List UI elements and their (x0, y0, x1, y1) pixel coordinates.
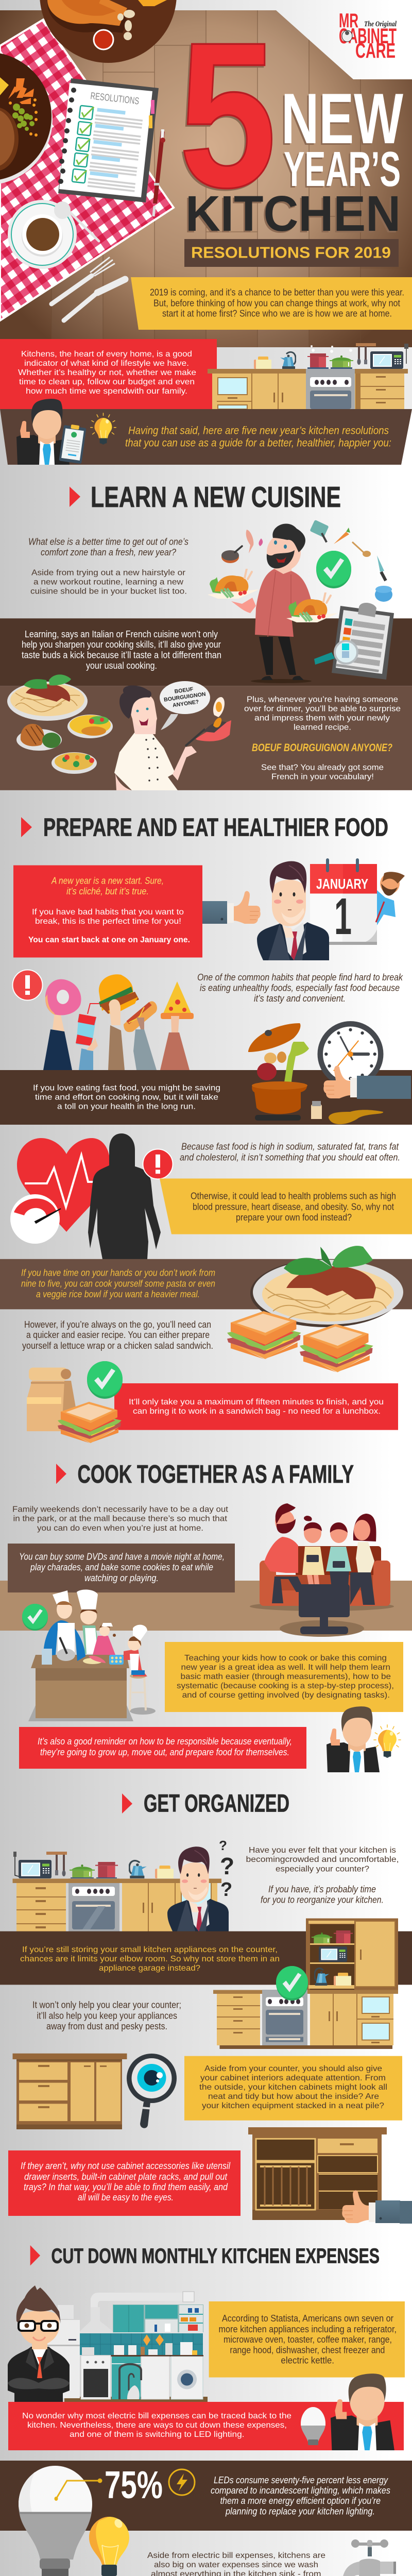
icon: warning (143, 1149, 173, 1179)
text block: clear counter: away from dust and pesky pests. (46, 2021, 167, 2031)
text block: comfort zone: cuisine should be in your bucket list too. (30, 587, 187, 596)
lighter band: surprise guests: French in your vocabulary! (271, 772, 374, 781)
father baker (43, 1590, 85, 1661)
icon: big spaghetti plate (250, 1246, 403, 1327)
father (264, 1503, 305, 1603)
dark band: sharpen skills: help you sharpen your cooking skills, it’ll also give your (22, 639, 221, 650)
red panel: responsibility: they’re going to grow up, move out, and prepare food for themselves. (40, 1747, 289, 1757)
text block: on the go: a quicker and easier recipe. You can either prepare (26, 1329, 210, 1340)
yellow panel: cabinet interiors: Aside from your counter, you should also give (204, 2064, 382, 2073)
brown band: pasta: If you have time on your hands or you don’t work from (21, 1267, 215, 1278)
red panel: cabinet accessories: If they aren’t, why not use cabinet accessories like utensil (21, 2160, 231, 2171)
icon: bearded man peeking (376, 872, 405, 925)
red intro panel: Whether it’s healthy or not, whether we make (18, 368, 196, 377)
yellow panel: cabinet interiors (184, 2056, 402, 2121)
top-right white corner (276, 10, 412, 79)
lighter band: surprise guests: learned recipe. (294, 723, 351, 732)
question marks: ? (220, 1879, 232, 1901)
dark band: appliance garage (0, 1931, 412, 1985)
dark band: sharpen skills: your usual cooking. (86, 660, 157, 671)
food plate: spaghetti (7, 674, 88, 721)
subtitle banner (184, 239, 399, 267)
red panel: new start: it’s cliché, but it’s true. (66, 886, 149, 896)
text block: comfort zone: Aside from trying out a new hairstyle or (31, 568, 186, 577)
yellow panel: statista (209, 2301, 405, 2377)
title: big five: 5 (179, 0, 277, 231)
icon: green check badge (316, 551, 351, 588)
plate of roast chicken (40, 0, 177, 63)
icon: light bulb (91, 413, 116, 445)
text block: on the go: yourself a lettuce wrap or a chicken salad sandwich. (22, 1340, 213, 1351)
floor band (0, 1581, 412, 1631)
text block: crowded kitchen: especially your counter? (276, 1865, 369, 1873)
dark band: sharpen skills: Learning, says an Italian or French cuisine won’t only (25, 629, 218, 639)
icon: yellow incandescent bulb (89, 2517, 129, 2576)
resolutions notebook (58, 78, 159, 202)
dark band: 75% (0, 2461, 412, 2531)
coffee cup on saucer (8, 200, 99, 269)
wood table hero background (0, 10, 412, 347)
text block: crowded kitchen: becomingcrowded and uncomfortable, (246, 1855, 399, 1864)
text block: on the go (22, 1319, 213, 1351)
text block: crowded kitchen: If you have, it’s probably time (268, 1884, 376, 1894)
text block: comfort zone: What else is a better time to get out of one’s (28, 536, 188, 547)
dark band: sharpen skills: taste buds a kick because it’ll taste a lot different than (22, 650, 221, 660)
speech bubble: ANYONE? (172, 699, 199, 708)
red intro panel: indicator of what kind of lifestyle we have. (24, 359, 189, 368)
food plate: fries and chicken (67, 715, 113, 738)
stat: 75 percent: 75% (105, 2463, 163, 2506)
brown band: pasta (0, 1259, 412, 1309)
red panel: responsibility: It’s also a good reminder on how to be responsible because eventually, (38, 1736, 292, 1747)
notebook heading: RESOLUTIONS (90, 91, 140, 107)
icon: sandwiches (227, 1311, 373, 1372)
fork and knife (52, 258, 125, 320)
icon: chef holding turkeys (208, 523, 338, 683)
brand logo: MR (339, 10, 358, 32)
icon: thumbs up (342, 2191, 412, 2224)
speech bubble: BOURGUIGNON (163, 691, 206, 703)
food plate: grilled chicken and salad (16, 724, 62, 751)
open cabinet with plate rack (248, 2127, 387, 2220)
pen (153, 129, 165, 216)
calendar: January 1 (310, 860, 377, 945)
lighter band: surprise guests: and impress them with your newly (254, 714, 390, 722)
icon: businessman with clipboard (16, 399, 87, 465)
dark band: health toll: time and effort on cooking now, but it will take (35, 1093, 218, 1101)
red panel: fifteen minutes (114, 1383, 398, 1430)
text block: crowded kitchen: Have you ever felt that your kitchen is (249, 1846, 396, 1855)
text block: common habits: it’s tasty and convenient. (254, 993, 346, 1004)
icon: chef with frying pan and speech bubble (114, 681, 231, 790)
text block: clear counter: it’ll also help you keep your appliances (37, 2010, 177, 2021)
question marks (219, 1838, 234, 1901)
closed cabinet (12, 2054, 127, 2129)
question marks: ? (219, 1838, 227, 1853)
icon: green check badge (22, 1604, 48, 1631)
text block: on the go: However, if you’re always on the go, you’ll need can (24, 1319, 211, 1330)
food plate: mixed vegetables (52, 752, 97, 774)
icon: man with glasses (8, 2285, 70, 2402)
text block: water expenses: Aside from electric bill expenses, kitchens are (147, 2551, 325, 2560)
yellow panel: prepare own food: prepare your own food instead? (236, 1212, 352, 1223)
icon: warning (12, 970, 42, 1001)
brand logo: The Original (364, 20, 397, 28)
son (326, 1522, 351, 1592)
icon: cooking pot with falling vegetables (248, 1023, 383, 1124)
dark band: 75%: planning to replace your kitchen lighting. (225, 2506, 375, 2517)
icon: magnifier with eye (127, 2054, 177, 2128)
text block: common habits (197, 972, 404, 1004)
icon: green check badge (87, 1361, 123, 1399)
section 1 heading: LEARN A NEW CUISINE (91, 481, 341, 513)
plate of steak and vegetables (0, 52, 53, 185)
dark band: appliance garage: If you’re still storing your small kitchen appliances on the counter, (22, 1945, 278, 1954)
red panel: new start: If you have bad habits that you want to (32, 908, 184, 917)
brown panel: movie night: play charades, and bake some cookies to eat while (30, 1562, 213, 1572)
icon: green check badge (276, 1966, 308, 2001)
brown panel: movie night (8, 1544, 235, 1592)
lighter band: surprise guests: See that? You already got some (261, 763, 384, 772)
icon: large LED bulb (19, 2466, 102, 2576)
text block: family weekends (12, 1505, 229, 1533)
speech bubble: BOEUF (174, 686, 194, 695)
speech bubble (160, 681, 210, 714)
red panel: cabinet accessories: trays? In that way, you’ll be able to find them easily, and (24, 2181, 228, 2192)
dark band: 75%: compared to incandescent lighting, which makes (211, 2485, 390, 2496)
text block: sodium (180, 1141, 400, 1162)
icon: woman silhouette (88, 1133, 161, 1259)
text block: clear counter: It won’t only help you clear your counter; (32, 1999, 181, 2010)
dark band: health toll: a toll on your health in the long run. (57, 1103, 196, 1111)
red intro panel: time to clean up, follow our budget and even (19, 378, 195, 386)
girl baker (93, 1623, 116, 1655)
red panel: new start: You can start back at one on January one. (28, 936, 190, 944)
question marks: ? (220, 1853, 234, 1879)
kitchen illustration (208, 343, 412, 409)
cluttered kitchen (12, 1852, 221, 1931)
icon: blood pressure gauge (10, 1194, 61, 1244)
daughter (302, 1516, 324, 1593)
yellow panel: teaching kids (165, 1642, 403, 1712)
icon: family on sofa watching tv (250, 1503, 394, 1637)
lighter band: surprise guests: over for dinner, you’ll be able to surprise (244, 704, 401, 713)
red intro panel: Kitchens, the heart of every home, is a good (21, 350, 192, 359)
icon: clipboard with magnifier (314, 603, 394, 680)
text block: water expenses: also big on water expenses since we wash (154, 2561, 318, 2569)
icon: light bulb (374, 1725, 401, 1758)
dark band: 75%: LEDs consume seventy-five percent less energy (214, 2475, 388, 2485)
brand logo (339, 10, 397, 62)
red panel: new start: break, this is the perfect time for you! (35, 917, 181, 926)
dark band: health toll: If you love eating fast food, you might be saving (33, 1084, 220, 1093)
text block: family weekends: Family weekends don’t necessarily have to be a day out (12, 1505, 229, 1514)
icon: thinking man (167, 1846, 229, 1931)
text block: family weekends: in the park, or at the mall because there’s so much that (13, 1515, 228, 1523)
text block: crowded kitchen: for you to reorganize your kitchen. (261, 1894, 384, 1905)
text block: comfort zone: a new workout routine, learning a new (33, 578, 183, 586)
icon: thinking man (257, 861, 329, 960)
calendar: January 1: 1 (334, 888, 352, 945)
yellow panel: teaching kids: systematic (because cooking is a step-by-step process), (177, 1682, 394, 1690)
icon: full appliance kitchen (45, 2292, 208, 2402)
icon: heart with pulse (17, 1138, 110, 1232)
icon: family baking together (28, 1589, 156, 1721)
yellow panel: prepare own food (160, 1179, 412, 1234)
flying kitchen items (221, 520, 392, 602)
icon: tap filling container (297, 2539, 396, 2576)
red intro panel (0, 339, 217, 409)
red panel: LED lighting: and one of them is switching to LED lighting. (70, 2430, 244, 2439)
red panel: cabinet accessories: all will be easy to the eyes. (78, 2192, 174, 2202)
text block: water expenses (147, 2551, 325, 2576)
icon: businessman with idea (327, 1706, 380, 1772)
yellow panel: teaching kids: new year is a great idea as well. It will help them learn (181, 1663, 390, 1672)
lighter band: surprise guests: Plus, whenever you’re having someone (247, 695, 398, 704)
text block: family weekends: you can do even when you’re just at home. (37, 1524, 203, 1533)
subtitle banner: RESOLUTIONS FOR 2019 (191, 243, 391, 262)
red panel: responsibility (19, 1727, 306, 1769)
section 4 heading (122, 1790, 289, 1818)
icon: clock and hand (320, 1024, 411, 1099)
red panel: fifteen minutes: It’ll only take you a maximum of fifteen minutes to finish, and you (129, 1398, 384, 1406)
yellow panel: cabinet interiors: your kitchen equipment stacked in a neat pile? (202, 2102, 384, 2110)
organized kitchen with appliance garage (213, 1919, 398, 2049)
red panel: LED lighting: kitchen. Nevertheless, there are ways to cut down these expenses, (27, 2421, 287, 2430)
icon: LED bulb (301, 2407, 325, 2445)
text block: comfort zone: comfort zone than a fresh, new year? (41, 547, 177, 557)
yellow panel: statista: electric kettle. (281, 2355, 334, 2366)
red panel: new start (13, 866, 202, 957)
text block: clear counter (32, 1999, 181, 2031)
red panel: LED lighting: No wonder why most electric bill expenses can be traced back to the (22, 2412, 291, 2420)
mother (350, 1514, 376, 1605)
section 4 heading: GET ORGANIZED (144, 1790, 289, 1818)
red panel: cabinet accessories: drawer inserts, built-in cabinet plate racks, and pull out (24, 2171, 228, 2182)
lighter band: surprise guests (0, 686, 412, 790)
yellow panel: cabinet interiors: neat and tidy but how about the inside? Are (208, 2092, 379, 2101)
icon: sandwich (58, 1402, 122, 1443)
icon: thumbs up (202, 891, 261, 924)
icon: businessman pointing (331, 2374, 394, 2450)
red-check tablecloth (0, 20, 174, 320)
red intro panel: how much time we spendwith our family. (26, 387, 187, 396)
dark band: health toll (0, 1070, 412, 1125)
red panel: fifteen minutes: can bring it to work in a sandwich bag - no need for a lunchbox. (133, 1407, 381, 1416)
icon: lightning bolt (169, 2469, 195, 2495)
intro yellow panel (131, 277, 412, 330)
red panel: LED lighting (8, 2402, 404, 2450)
dark band: 75%: them a more energy efficient option if you’re (220, 2495, 381, 2506)
brown panel: movie night: watching or playing. (84, 1572, 159, 1583)
yellow panel: teaching kids: and of course getting involved (by designating tasks). (182, 1691, 390, 1700)
yellow panel: statista: range hood, dishwasher, chest freezer and (230, 2345, 385, 2355)
yellow panel: teaching kids: basic math easier (through measurements), how to be (180, 1672, 391, 1681)
dark band: sharpen skills (0, 618, 412, 686)
brown band: pasta: a veggie rice bowl if you want a heavier meal. (36, 1289, 200, 1299)
yellow panel: cabinet interiors: your cabinet interiors adequate attention. From (200, 2074, 386, 2082)
hands holding fast food (43, 974, 194, 1070)
text block: comfort zone (28, 536, 188, 596)
yellow panel: teaching kids: Teaching your kids how to cook or bake this coming (184, 1654, 387, 1663)
brown band: pasta: nine to five, you can cook yourself some pasta or even (21, 1278, 215, 1289)
brown lead-in band: Having that said, here are five new year’s kitchen resolutions (128, 425, 389, 436)
dark band: appliance garage: chances are it limits your elbow room. So why not store them in an (20, 1955, 280, 1963)
dark band: appliance garage: appliance garage instead? (99, 1964, 200, 1973)
text block: crowded kitchen (246, 1846, 399, 1905)
brown lead-in band (0, 409, 412, 465)
red panel: new start: A new year is a new start. Sure, (51, 875, 164, 886)
boy baker (124, 1625, 147, 1676)
calendar: January 1: JANUARY (316, 876, 368, 892)
brown panel: movie night: You can buy some DVDs and have a movie night at home, (19, 1551, 225, 1562)
title: KITCHEN: KITCHEN (185, 185, 401, 242)
icon: paper bag (27, 1367, 78, 1431)
yellow panel: cabinet interiors: the outside, your kitchen cabinets might look all (199, 2083, 387, 2092)
mother baker (77, 1589, 100, 1654)
red panel: cabinet accessories (8, 2150, 241, 2216)
